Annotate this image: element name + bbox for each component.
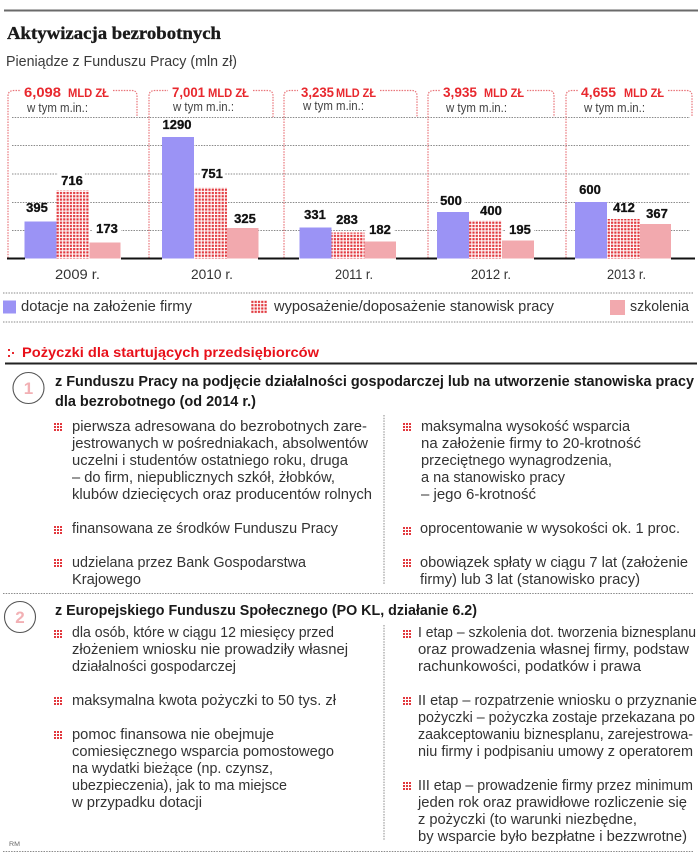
year labels <box>55 267 646 282</box>
bracket heading 2012: w tym m.in.: <box>445 101 507 115</box>
bullet: III etap: III etap – prowadzenie firmy przez minimum <box>418 778 693 794</box>
bullet: obowiązek spłaty: obowiązek spłaty w ciągu 7 lat (założenie <box>420 555 688 571</box>
section heading: Pożyczki dla startujących przedsiębiorców <box>22 344 319 360</box>
circle number 1: 1 <box>24 379 33 398</box>
bullet: I etap: oraz prowadzenia własnej firmy, podstaw <box>418 642 690 658</box>
circle number 1 <box>13 372 44 404</box>
legend item: szkolenia: szkolenia <box>630 299 690 315</box>
bullet: dla osób <box>54 625 348 675</box>
right column 2 <box>403 625 697 845</box>
bullet: maksymalna wysokość: przeciętnego wynagrodzenia, <box>421 453 612 469</box>
bullet: finansowana: finansowana ze środków Funduszu Pracy <box>72 521 339 537</box>
bars 2011: 182 <box>369 222 391 237</box>
grid lines and year brackets <box>8 90 692 258</box>
bars 2010: 325 <box>234 211 256 226</box>
bars 2012: 500 <box>440 193 462 208</box>
bars 2010: 1290 <box>163 117 191 132</box>
bullet: II etap <box>403 693 697 760</box>
bars 2013: 412 <box>613 200 635 215</box>
year labels: 2010 r. <box>191 267 233 282</box>
year labels: 2013 r. <box>607 267 646 282</box>
bullet: III etap: z pożyczki (to warunki niezbędne, <box>418 812 637 828</box>
bracket heading 2009: 6,098 <box>24 85 62 100</box>
bullet: II etap: zaakceptowaniu biznesplanu, zarejestrowa- <box>418 727 693 743</box>
year labels: 2009 r. <box>55 267 100 282</box>
bars 2009: 173 <box>96 221 118 236</box>
bars 2013 <box>575 182 671 258</box>
bullet: udzielana: Krajowego <box>72 572 141 588</box>
bracket heading 2010 <box>172 85 249 114</box>
bracket heading 2011: MLD ZŁ <box>336 88 376 100</box>
left column 2 <box>54 625 348 811</box>
bullet: I etap <box>403 625 696 675</box>
bracket heading 2013 <box>581 85 664 115</box>
bar chart <box>7 117 695 260</box>
bullet: pierwsza adresowana: jestrowanych w pośredniakach, absolwentów <box>71 436 369 452</box>
subtitle: Pieniądze z Funduszu Pracy (mln zł) <box>6 53 237 70</box>
year labels: 2012 r. <box>471 267 511 282</box>
bullet: pomoc finansowa: pomoc finansowa nie obejmuje <box>72 727 274 743</box>
bracket heading 2013: MLD ZŁ <box>624 88 664 100</box>
bullet: pierwsza adresowana: klubów dziecięcych oraz producentów rolnych <box>72 487 372 503</box>
legend item: dotacje: dotacje na założenie firmy <box>21 299 193 315</box>
bars 2011: 283 <box>336 212 358 227</box>
bullet: III etap <box>403 778 693 845</box>
bracket heading 2012: MLD ZŁ <box>484 88 524 100</box>
circle number 2: 2 <box>15 608 25 627</box>
bullet: pomoc finansowa: ubezpieczenia), jak to ma miejsce <box>72 778 287 794</box>
bracket heading 2009: w tym m.in.: <box>26 101 88 115</box>
bullet: maksymalna wysokość: a na stanowisko pracy <box>421 470 566 486</box>
right column 1 <box>403 419 688 588</box>
left column 1 <box>54 419 372 588</box>
author initials: RM <box>9 841 20 848</box>
bullet: maksymalna wysokość: – jego 6-krotność <box>421 487 536 503</box>
bars 2012: 195 <box>509 222 531 237</box>
bullet: dla osób: złożeniem wniosku nie prowadziły własnej <box>72 642 348 658</box>
bars 2011: 331 <box>304 207 326 222</box>
bracket heading 2011 <box>301 85 376 113</box>
legend item: wyposażenie: wyposażenie/doposażenie stanowisk pracy <box>273 299 555 315</box>
bracket heading 2011: w tym m.in.: <box>302 99 364 113</box>
bullet: II etap: niu firmy i podpisaniu umowy z operatorem <box>418 744 693 760</box>
bullet: oprocentowanie: oprocentowanie w wysokości ok. 1 proc. <box>420 521 680 537</box>
bracket heading 2010: w tym m.in.: <box>172 100 234 114</box>
bracket heading 2010: 7,001 <box>172 85 205 100</box>
bars 2011 <box>300 207 396 258</box>
bracket heading 2012: 3,935 <box>443 85 477 100</box>
bars 2010 <box>162 117 258 258</box>
bullet: maksymalna wysokość <box>403 419 641 503</box>
heading 2: z Europejskiego Funduszu Społecznego (PO KL, działanie 6.2) <box>55 603 477 619</box>
bracket heading 2013: 4,655 <box>581 85 616 100</box>
bars 2010: 751 <box>201 166 223 181</box>
bracket heading 2012 <box>443 85 524 115</box>
bullet: III etap: jeden rok oraz prawidłowe rozliczenie się <box>417 795 687 811</box>
bracket heading 2009 <box>24 85 109 115</box>
bullet: pomoc finansowa: w przypadku dotacji <box>71 795 202 811</box>
bullet: I etap: I etap – szkolenia dot. tworzenia biznesplanu <box>418 625 696 641</box>
bullet: pomoc finansowa: comiesięcznego wsparcia pomostowego <box>72 744 334 760</box>
bullet: pierwsza adresowana: pierwsza adresowana do bezrobotnych zare- <box>72 419 367 435</box>
heading 1 <box>55 374 694 410</box>
bars 2012 <box>437 193 534 258</box>
bullet: II etap: II etap – rozpatrzenie wniosku o przyznanie <box>418 693 697 709</box>
bars 2012: 400 <box>480 203 502 218</box>
bullet: II etap: pożyczki – pożyczka zostaje przekazana po <box>418 710 695 726</box>
bullet: obowiązek spłaty <box>403 555 688 588</box>
bullet: dla osób: dla osób, które w ciągu 12 miesięcy przed <box>72 625 334 641</box>
bars 2013: 367 <box>646 206 668 221</box>
bullet: dla osób: działalności gospodarczej <box>72 659 236 675</box>
title: Aktywizacja bezrobotnych <box>7 23 221 43</box>
bullet: pomoc finansowa <box>54 727 334 811</box>
bars 2009: 716 <box>61 173 83 188</box>
bullet: pomoc finansowa: na wydatki bieżące (np. czynsz, <box>72 761 273 777</box>
bullet: pierwsza adresowana: – do firm, niepublicznych szkół, żłobków, <box>72 470 335 486</box>
bars 2013: 600 <box>579 182 601 197</box>
bullet: pierwsza adresowana <box>54 419 372 503</box>
bullet: obowiązek spłaty: firmy) lub 3 lat (stanowisko pracy) <box>420 572 640 588</box>
bullet: maksymalna wysokość: na założenie firmy to 20-krotność <box>421 436 641 452</box>
bullet: udzielana <box>54 555 307 588</box>
bracket heading 2011: 3,235 <box>301 85 334 100</box>
bullet: udzielana: udzielana przez Bank Gospodarstwa <box>72 555 307 571</box>
bracket heading 2010: MLD ZŁ <box>208 88 249 100</box>
bullet: maksymalna wysokość: maksymalna wysokość wsparcia <box>421 419 631 435</box>
bullet: III etap: by wsparcie było bezpłatne i bezzwrotne) <box>418 829 687 845</box>
circle number 2 <box>4 602 36 632</box>
bullet: I etap: rachunkowości, podatków i prawa <box>418 659 642 675</box>
bullet: pierwsza adresowana: uczelni i studentów ostatniego roku, druga <box>72 453 349 469</box>
bracket heading 2013: w tym m.in.: <box>583 101 645 115</box>
year labels: 2011 r. <box>335 267 373 282</box>
bars 2009 <box>24 173 120 258</box>
heading 1: z Funduszu Pracy na podjęcie działalności gospodarczej lub na utworzenie stanowiska pracy <box>55 374 694 390</box>
bars 2009: 395 <box>26 200 48 215</box>
bracket heading 2009: MLD ZŁ <box>68 88 109 100</box>
heading 1: dla bezrobotnego (od 2014 r.) <box>55 394 256 410</box>
bullet: maksymalna kwota: maksymalna kwota pożyczki to 50 tys. zł <box>72 693 337 709</box>
legend <box>3 299 690 315</box>
